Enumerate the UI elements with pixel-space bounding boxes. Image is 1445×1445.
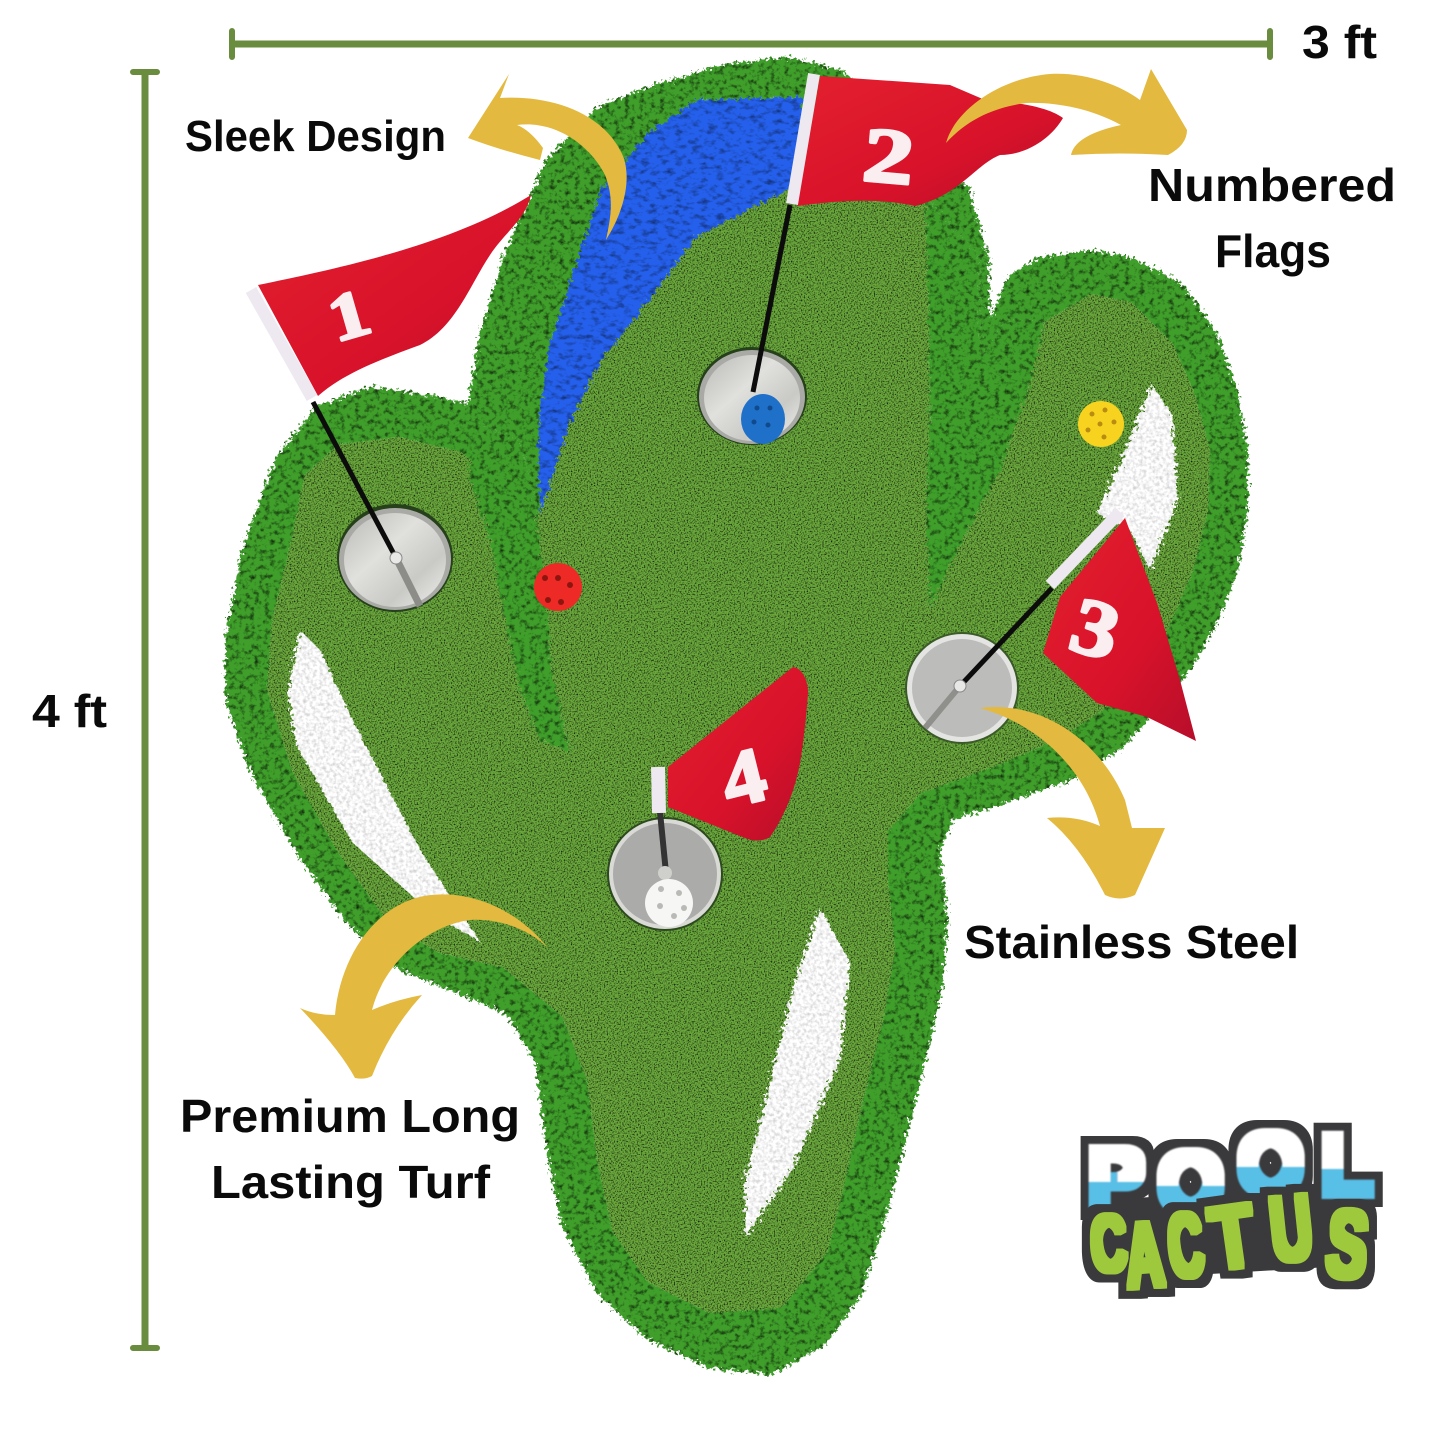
- flag 4: [658, 667, 808, 840]
- label: numbered flags: Numbered: [1148, 159, 1396, 211]
- white ball: [645, 879, 693, 927]
- flag 2: 2: [859, 110, 918, 202]
- long turf border: [230, 62, 1243, 1370]
- flag 3: 3: [1061, 579, 1130, 678]
- POOL wordmark: [1088, 1116, 1372, 1229]
- label: premium long lasting turf: Lasting Turf: [211, 1156, 491, 1208]
- hole 3 with flag: [905, 512, 1196, 744]
- label: premium long lasting turf: Premium Long: [180, 1090, 520, 1142]
- blue water hazard: [538, 97, 803, 515]
- flag 2: [792, 74, 1063, 206]
- POOL wordmark: O: [1238, 1116, 1303, 1210]
- logo: pool cactus: [1088, 1116, 1373, 1308]
- blue ball: [741, 394, 785, 444]
- POOL wordmark: L: [1321, 1118, 1372, 1212]
- arrow: premium turf: [300, 894, 548, 1079]
- CACTUS wordmark: U: [1265, 1175, 1317, 1282]
- CACTUS wordmark: T: [1204, 1186, 1261, 1290]
- CACTUS wordmark: C: [1088, 1199, 1129, 1290]
- label: numbered flags: Flags: [1215, 225, 1331, 277]
- arrow: sleek design: [468, 74, 627, 240]
- label: numbered flags: [1148, 159, 1396, 277]
- CACTUS wordmark: A: [1122, 1202, 1167, 1308]
- CACTUS wordmark: C: [1164, 1195, 1208, 1298]
- POOL wordmark: O: [1158, 1135, 1223, 1229]
- arrow: stainless steel: [980, 707, 1165, 898]
- height dimension line: 4 ft: [133, 72, 157, 1348]
- hole 2 with flag: [697, 74, 1063, 445]
- label: 4 ft: 4 ft: [32, 685, 107, 737]
- flag 3: [1043, 512, 1196, 741]
- white sand bunker bottom: [745, 908, 850, 1238]
- flag 1: [251, 195, 531, 398]
- POOL wordmark: P: [1088, 1131, 1144, 1225]
- CACTUS wordmark: [1088, 1175, 1373, 1308]
- arrow: numbered flags: [946, 69, 1187, 155]
- left turf ridge: [470, 420, 570, 752]
- flag 1: 1: [320, 275, 378, 356]
- red ball: [534, 563, 582, 611]
- right turf ridge: [925, 195, 1045, 608]
- label: premium long lasting turf: [180, 1090, 520, 1208]
- white sand bunker left: [288, 630, 480, 942]
- width dimension line: 3 ft: [232, 31, 1270, 57]
- label: 3 ft: 3 ft: [1302, 16, 1377, 68]
- hole 4 with flag: [607, 667, 808, 931]
- short turf fairway: [270, 190, 1207, 1310]
- white sand bunker right: [1097, 384, 1178, 570]
- cactus putting green: [230, 62, 1243, 1370]
- label: stainless steel: Stainless Steel: [964, 916, 1299, 968]
- yellow ball: [1078, 401, 1124, 447]
- logo backing: [1100, 1185, 1362, 1280]
- CACTUS wordmark: S: [1322, 1189, 1373, 1301]
- flag 4: 4: [712, 730, 775, 825]
- label: sleek design: Sleek Design: [185, 112, 446, 161]
- hole 1 with flag: [251, 195, 531, 612]
